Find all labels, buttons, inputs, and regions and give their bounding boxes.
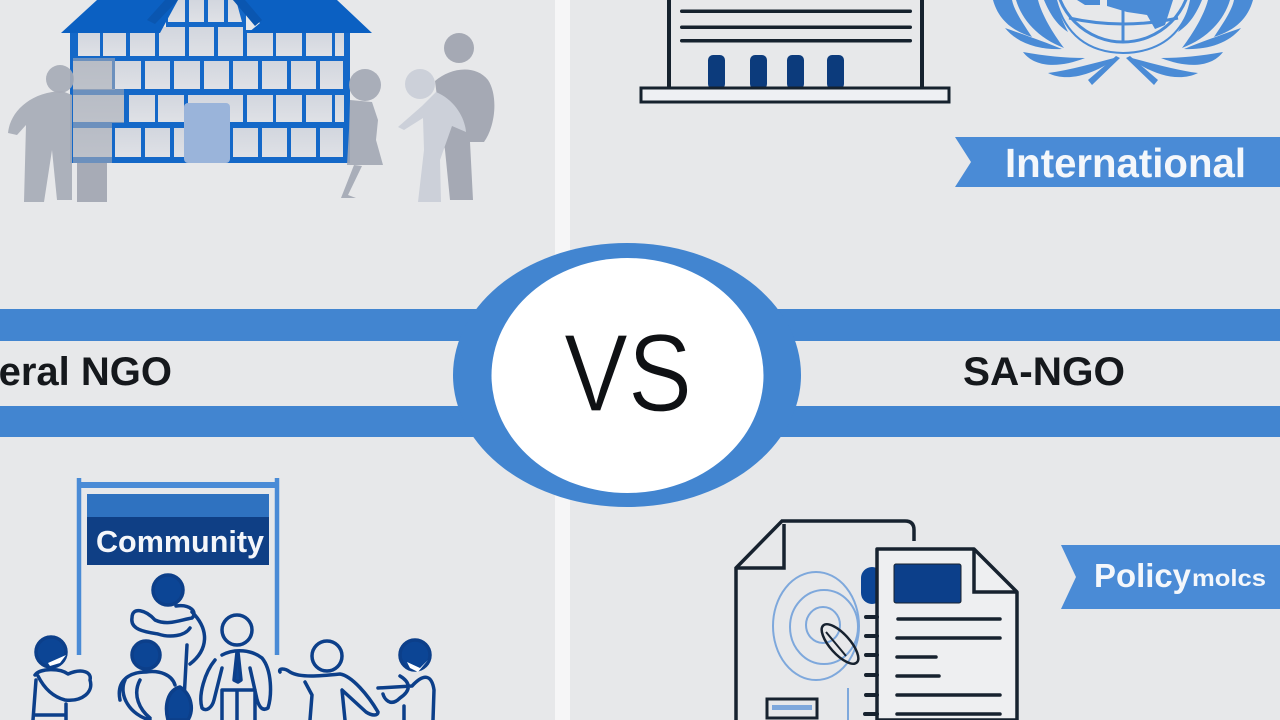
ribbon: Policymolcs: [1061, 545, 1280, 609]
icon: child figure in dress: [341, 69, 383, 198]
icon: second figure at house: [73, 58, 124, 163]
ribbon: International: [955, 137, 1280, 187]
icon: house: [61, 0, 372, 163]
icon: second figure legs: [77, 163, 107, 202]
icon: light adult figure: [398, 69, 466, 202]
ribbon: International: International: [1005, 140, 1246, 186]
ribbon: Policymolcs: molcs: [1192, 565, 1266, 591]
comparison bands: [0, 309, 1280, 437]
icon: adult figure left: [8, 65, 74, 202]
icon: community banner: Community: [96, 524, 265, 559]
panel: general NGO local building and people: [8, 0, 494, 202]
icon: community banner: [79, 478, 277, 655]
badge: VS: VS: [564, 312, 692, 435]
icon: policy documents: [736, 521, 1017, 720]
panel: international building: [641, 0, 1280, 187]
panel: policy: [736, 521, 1280, 720]
icon: tall adult figure: [435, 33, 494, 200]
icon: government building: [641, 0, 949, 102]
panel: community: [33, 478, 434, 720]
icon: community people: [33, 575, 434, 720]
badge: VS: [453, 243, 801, 507]
ribbon: Policymolcs: Policy: [1094, 557, 1192, 594]
icon: UN style emblem: [993, 0, 1253, 85]
heading: SA-NGO: SA-NGO: [963, 350, 1125, 394]
